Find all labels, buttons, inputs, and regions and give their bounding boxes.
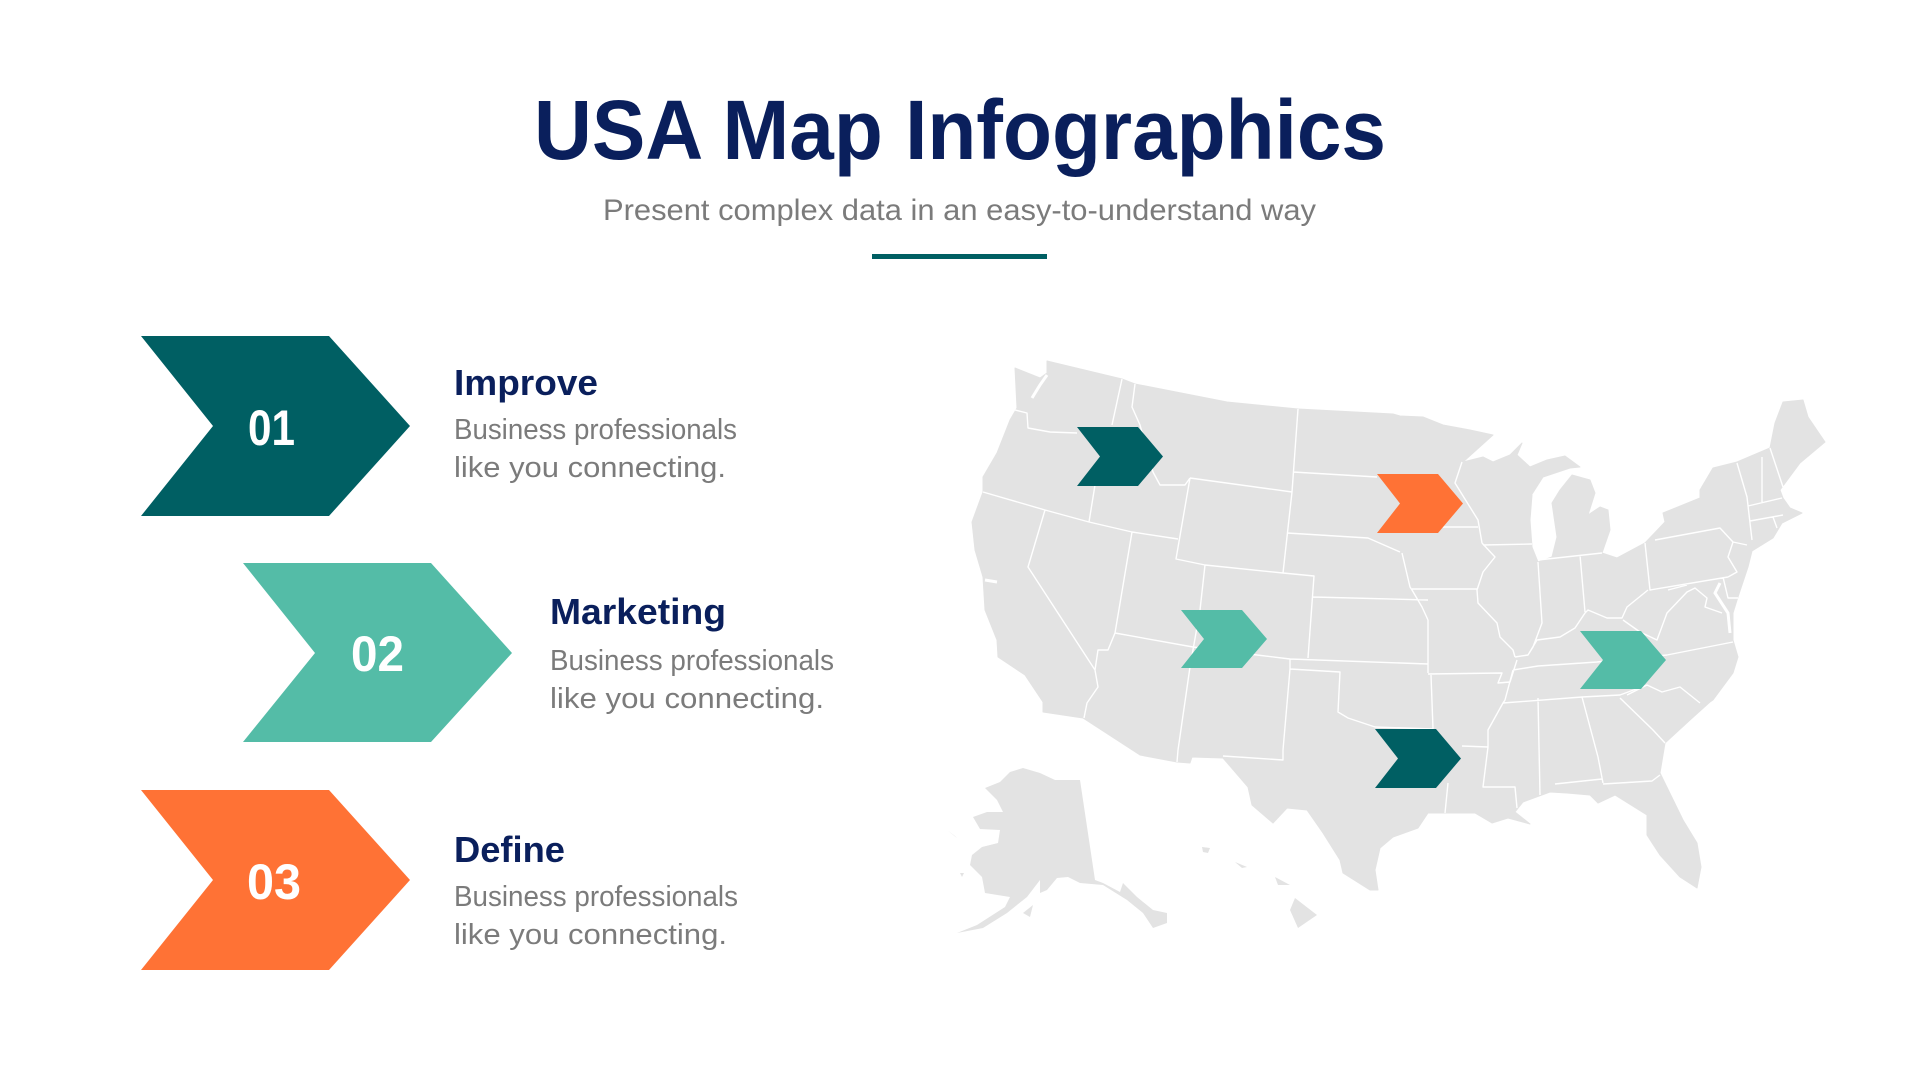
text improve: Business professionals xyxy=(454,414,737,446)
chevron 02 xyxy=(243,563,512,742)
map marker: texas xyxy=(1375,729,1461,788)
number 02: 02 xyxy=(351,626,404,682)
text improve xyxy=(454,414,737,484)
heading define: Define xyxy=(454,829,565,870)
heading improve: Improve xyxy=(454,362,598,403)
title: USA Map Infographics xyxy=(534,83,1386,177)
text improve: like you connecting. xyxy=(454,452,726,484)
usa map xyxy=(947,361,1825,933)
map marker: colorado xyxy=(1181,610,1267,668)
item 03: define xyxy=(141,790,738,970)
hawaii xyxy=(1202,847,1317,928)
chevron 01 xyxy=(141,336,410,516)
number 01: 01 xyxy=(248,400,295,456)
number 03: 03 xyxy=(247,854,301,910)
heading marketing: Marketing xyxy=(550,591,726,632)
chevron 03 xyxy=(141,790,410,970)
text define xyxy=(454,881,738,951)
bays and inland water xyxy=(985,375,1730,633)
item 01: improve xyxy=(141,336,737,516)
text marketing: Business professionals xyxy=(550,645,834,677)
text define: like you connecting. xyxy=(454,919,727,951)
state borders xyxy=(983,379,1783,813)
subtitle: Present complex data in an easy-to-understand way xyxy=(603,194,1316,227)
alaska islands xyxy=(947,830,1033,917)
map marker: idaho xyxy=(1077,427,1163,486)
item 02: marketing xyxy=(243,563,834,742)
map marker: minnesota xyxy=(1377,474,1463,533)
text marketing xyxy=(550,645,834,715)
text define: Business professionals xyxy=(454,881,738,913)
alaska xyxy=(957,768,1167,933)
contiguous states landmass xyxy=(972,361,1825,890)
map marker: north carolina xyxy=(1580,631,1666,689)
title underline xyxy=(872,254,1047,259)
text marketing: like you connecting. xyxy=(550,683,824,715)
